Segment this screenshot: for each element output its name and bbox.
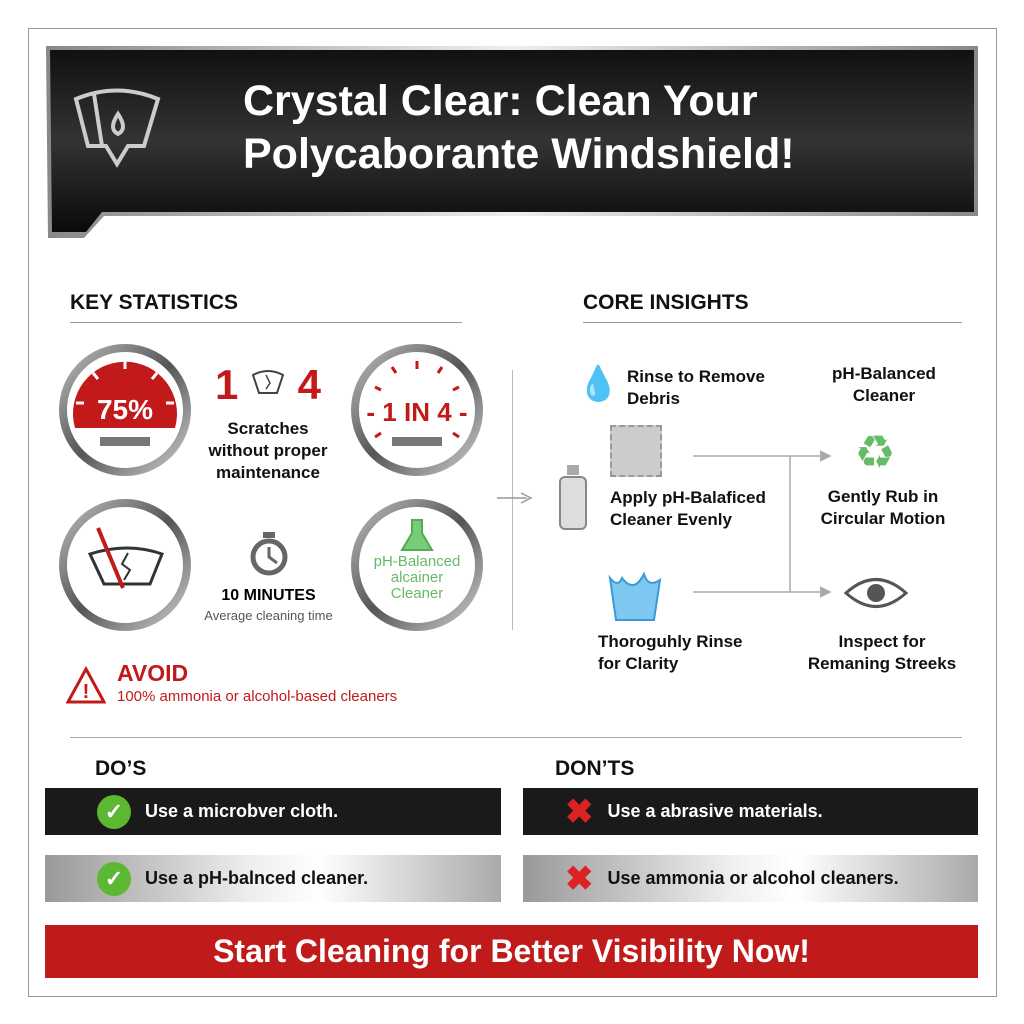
gauge 75%: [59, 344, 191, 476]
call to action banner: Start Cleaning for Better Visibility Now!: [213, 933, 810, 969]
step: thoroughly rinse: for Clarity: [598, 654, 678, 673]
step: inspect: Inspect for: [839, 632, 925, 651]
icon: cloth: [610, 425, 662, 477]
gauge 1 in 4: [351, 344, 483, 476]
do 1: ✓: [105, 798, 123, 824]
step: ph balanced: pH-Balanced: [832, 364, 936, 383]
step: gently rub: [821, 487, 945, 528]
stat: 10 minutes: [204, 532, 333, 623]
icon: ph balanced circle: Cleaner: [391, 585, 443, 602]
step: gently rub: Circular Motion: [821, 509, 945, 528]
step: thoroughly rinse: Thoroguhly Rinse: [598, 632, 742, 651]
callout: avoid: !: [83, 681, 89, 703]
step: rinse: Rinse to Remove: [627, 367, 765, 386]
icon: ph balanced circle: pH-Balanced: [374, 553, 460, 570]
step: inspect: Remaning Streeks: [808, 654, 956, 673]
step: inspect: [808, 632, 956, 673]
callout: avoid: [66, 660, 397, 705]
stat: 10 minutes: 10 MINUTES: [221, 587, 316, 604]
heading: dos: DO’S: [95, 757, 146, 780]
title banner: [46, 46, 978, 238]
dont 2: Use ammonia or alcohol cleaners.: [608, 868, 899, 888]
gauge 75%: 75%: [97, 394, 153, 425]
step: thoroughly rinse: [598, 632, 742, 673]
dont 1: [523, 788, 978, 835]
icon: windshield: [74, 88, 160, 168]
do 2: Use a pH-balnced cleaner.: [145, 868, 368, 888]
do 1: Use a microbver cloth.: [145, 801, 338, 821]
dont 1: Use a abrasive materials.: [608, 801, 823, 821]
stat: 1 in 4 scratches: 1 4: [215, 361, 321, 408]
heading: key statistics: KEY STATISTICS: [70, 291, 238, 314]
connectors: [693, 450, 832, 598]
icon: broken windshield circle: [59, 499, 191, 631]
dont 1: ✖: [565, 792, 594, 830]
stat: 1 in 4 scratches: Scratches without proper maintenance: [208, 419, 327, 482]
stat: 1 in 4 scratches: [208, 361, 328, 482]
do 1: [45, 788, 501, 835]
arrow: [497, 492, 532, 504]
icon: bottle: [559, 465, 587, 530]
step: rinse: Debris: [627, 389, 680, 408]
step: ph balanced: Cleaner: [853, 386, 915, 405]
do 2: [45, 855, 501, 902]
icon: recycle: ♻: [854, 426, 896, 478]
step: rinse: 💧: [577, 365, 619, 403]
step: apply: Apply pH-Balaficed: [610, 488, 766, 507]
do 2: ✓: [105, 866, 123, 890]
step: ph balanced: [832, 364, 936, 405]
heading: donts: DON’TS: [555, 757, 634, 780]
title text: Crystal Clear: Clean Your: [243, 77, 758, 125]
step: gently rub: Gently Rub in: [828, 487, 938, 506]
icon: ph balanced circle: alcainer: [391, 569, 443, 586]
icon: splash: [608, 571, 662, 621]
dont 2: [523, 855, 978, 902]
heading: core insights: CORE INSIGHTS: [583, 291, 749, 314]
icon: ph balanced circle: [351, 499, 483, 631]
step: rinse: [577, 364, 765, 408]
gauge 1 in 4: - 1 IN 4 -: [366, 397, 468, 427]
dont 2: ✖: [565, 860, 594, 898]
call to action banner: [45, 925, 978, 978]
stat: 10 minutes: Average cleaning time: [204, 608, 333, 623]
title text: Polycaborante Windshield!: [243, 130, 795, 178]
icon: eye: [844, 578, 908, 608]
step: apply: Cleaner Evenly: [610, 510, 732, 529]
title text: [243, 77, 795, 178]
callout: avoid: 100% ammonia or alcohol-based cleaners: [117, 688, 397, 705]
callout: avoid: AVOID: [117, 660, 188, 686]
step: apply: [610, 488, 766, 529]
